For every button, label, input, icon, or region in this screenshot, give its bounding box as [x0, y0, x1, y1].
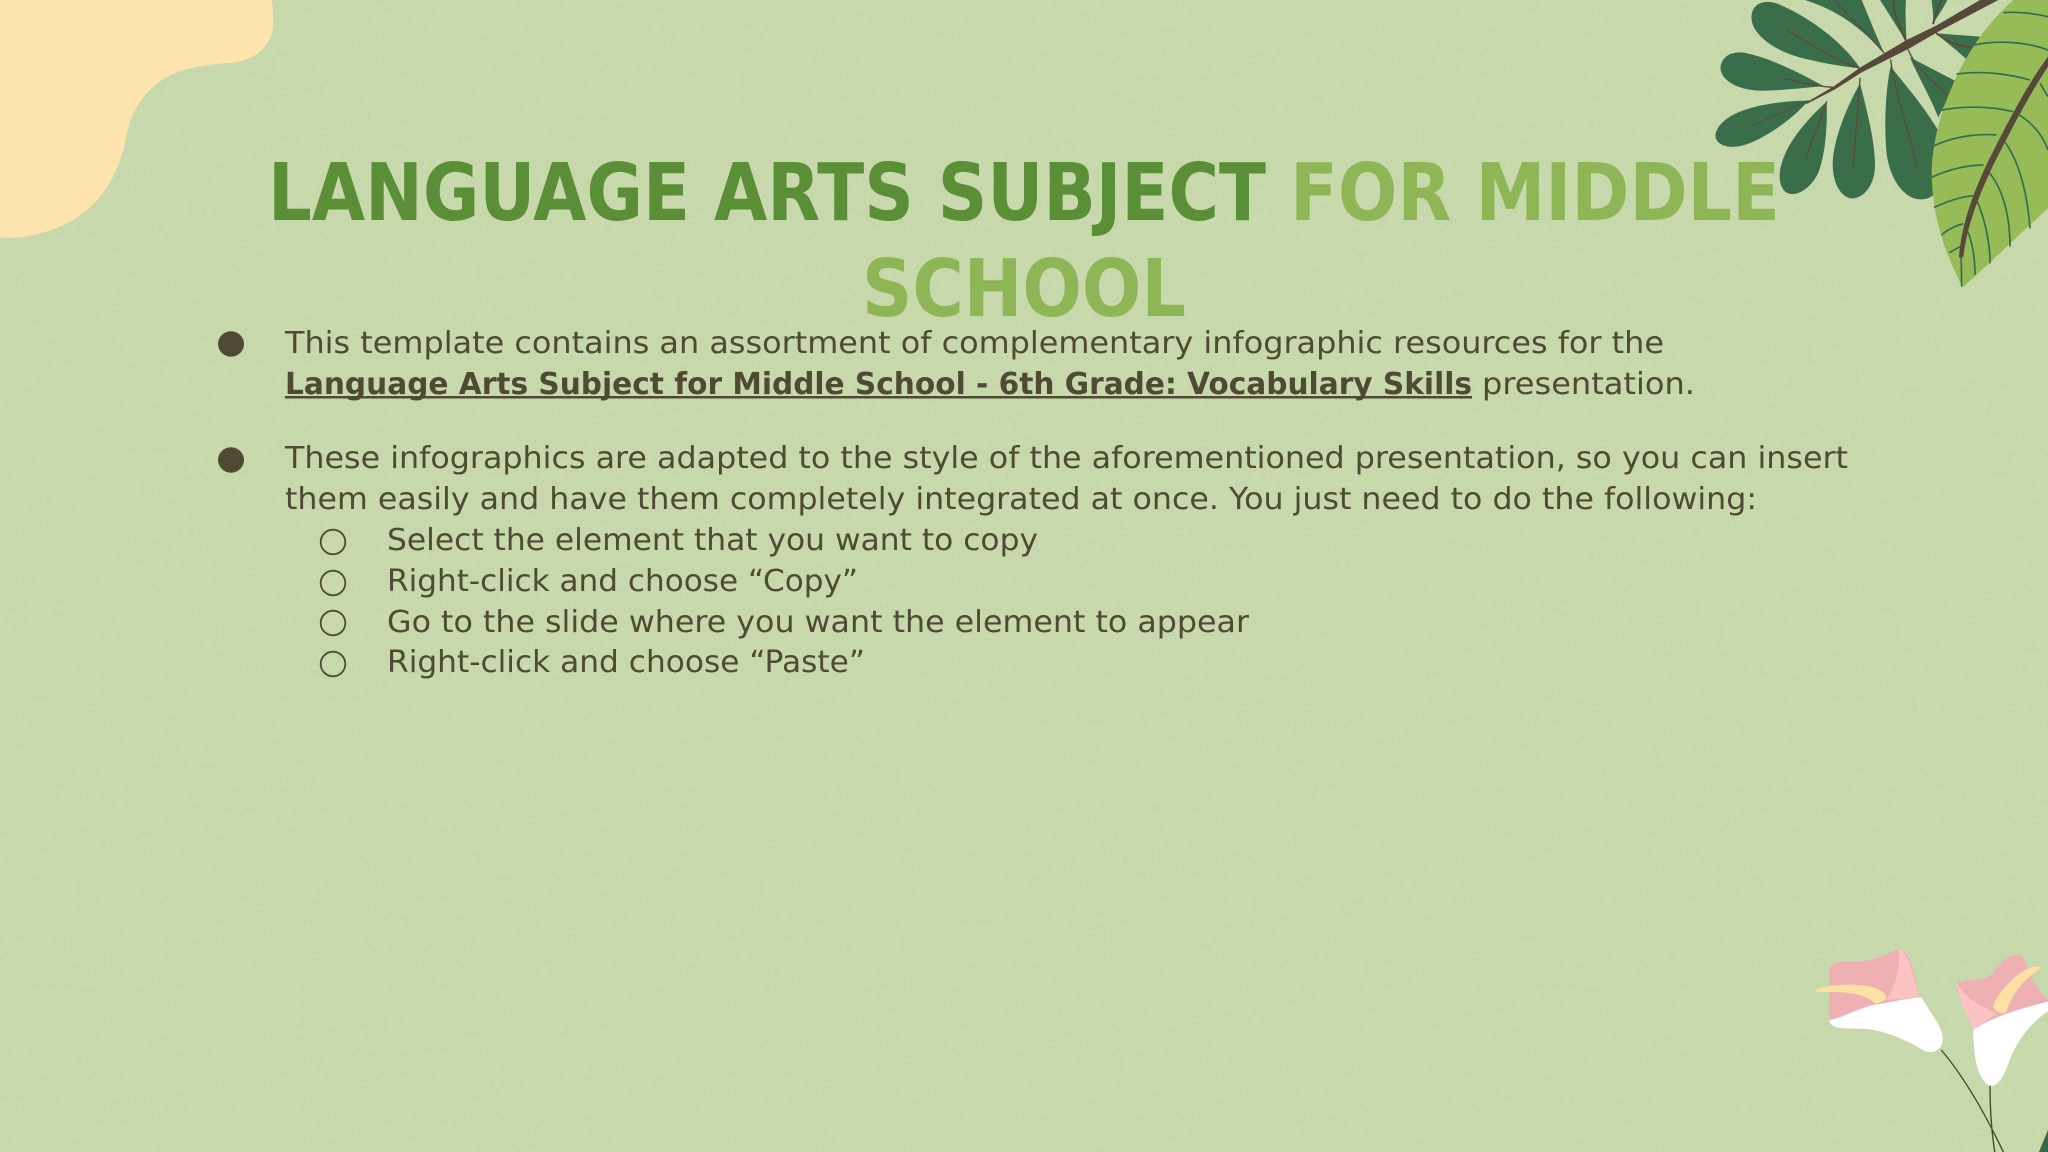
icon: pink and white flowers bottom right — [1816, 949, 2048, 1152]
decorative blob: top-left cream shape — [0, 0, 273, 238]
bullet 1: Language Arts Subject for Middle School - 6th Grade: Vocabulary Skills — [285, 367, 1472, 402]
bullet 2: These infographics are adapted to the style of the aforementioned presentation, so you can insert — [284, 441, 1848, 476]
title: FOR MIDDLE — [1290, 147, 1780, 239]
bullet 1: This template contains an assortment of complementary infographic resources for the — [284, 326, 1664, 361]
sub-list of steps: Right-click and choose “Paste” — [387, 645, 865, 680]
bullet 2 — [218, 441, 1848, 517]
icon: large green leaf — [1932, 0, 2048, 287]
bullet 2: them easily and have them completely integrated at once. You just need to do the following: — [285, 482, 1757, 517]
sub-list of steps: Right-click and choose “Copy” — [387, 564, 858, 599]
title: LANGUAGE ARTS SUBJECT — [268, 147, 1266, 239]
icon: leafy branch top right — [1715, 0, 2048, 287]
sub-list of steps — [321, 523, 1250, 680]
sub-list of steps: Go to the slide where you want the element to appear — [387, 605, 1250, 640]
bullet list — [218, 326, 1848, 680]
sub-list of steps: Select the element that you want to copy — [387, 523, 1038, 558]
bullet 1 — [218, 326, 1695, 402]
title: SCHOOL — [862, 243, 1186, 335]
bullet 1: presentation. — [1482, 367, 1695, 402]
title — [268, 147, 1780, 335]
